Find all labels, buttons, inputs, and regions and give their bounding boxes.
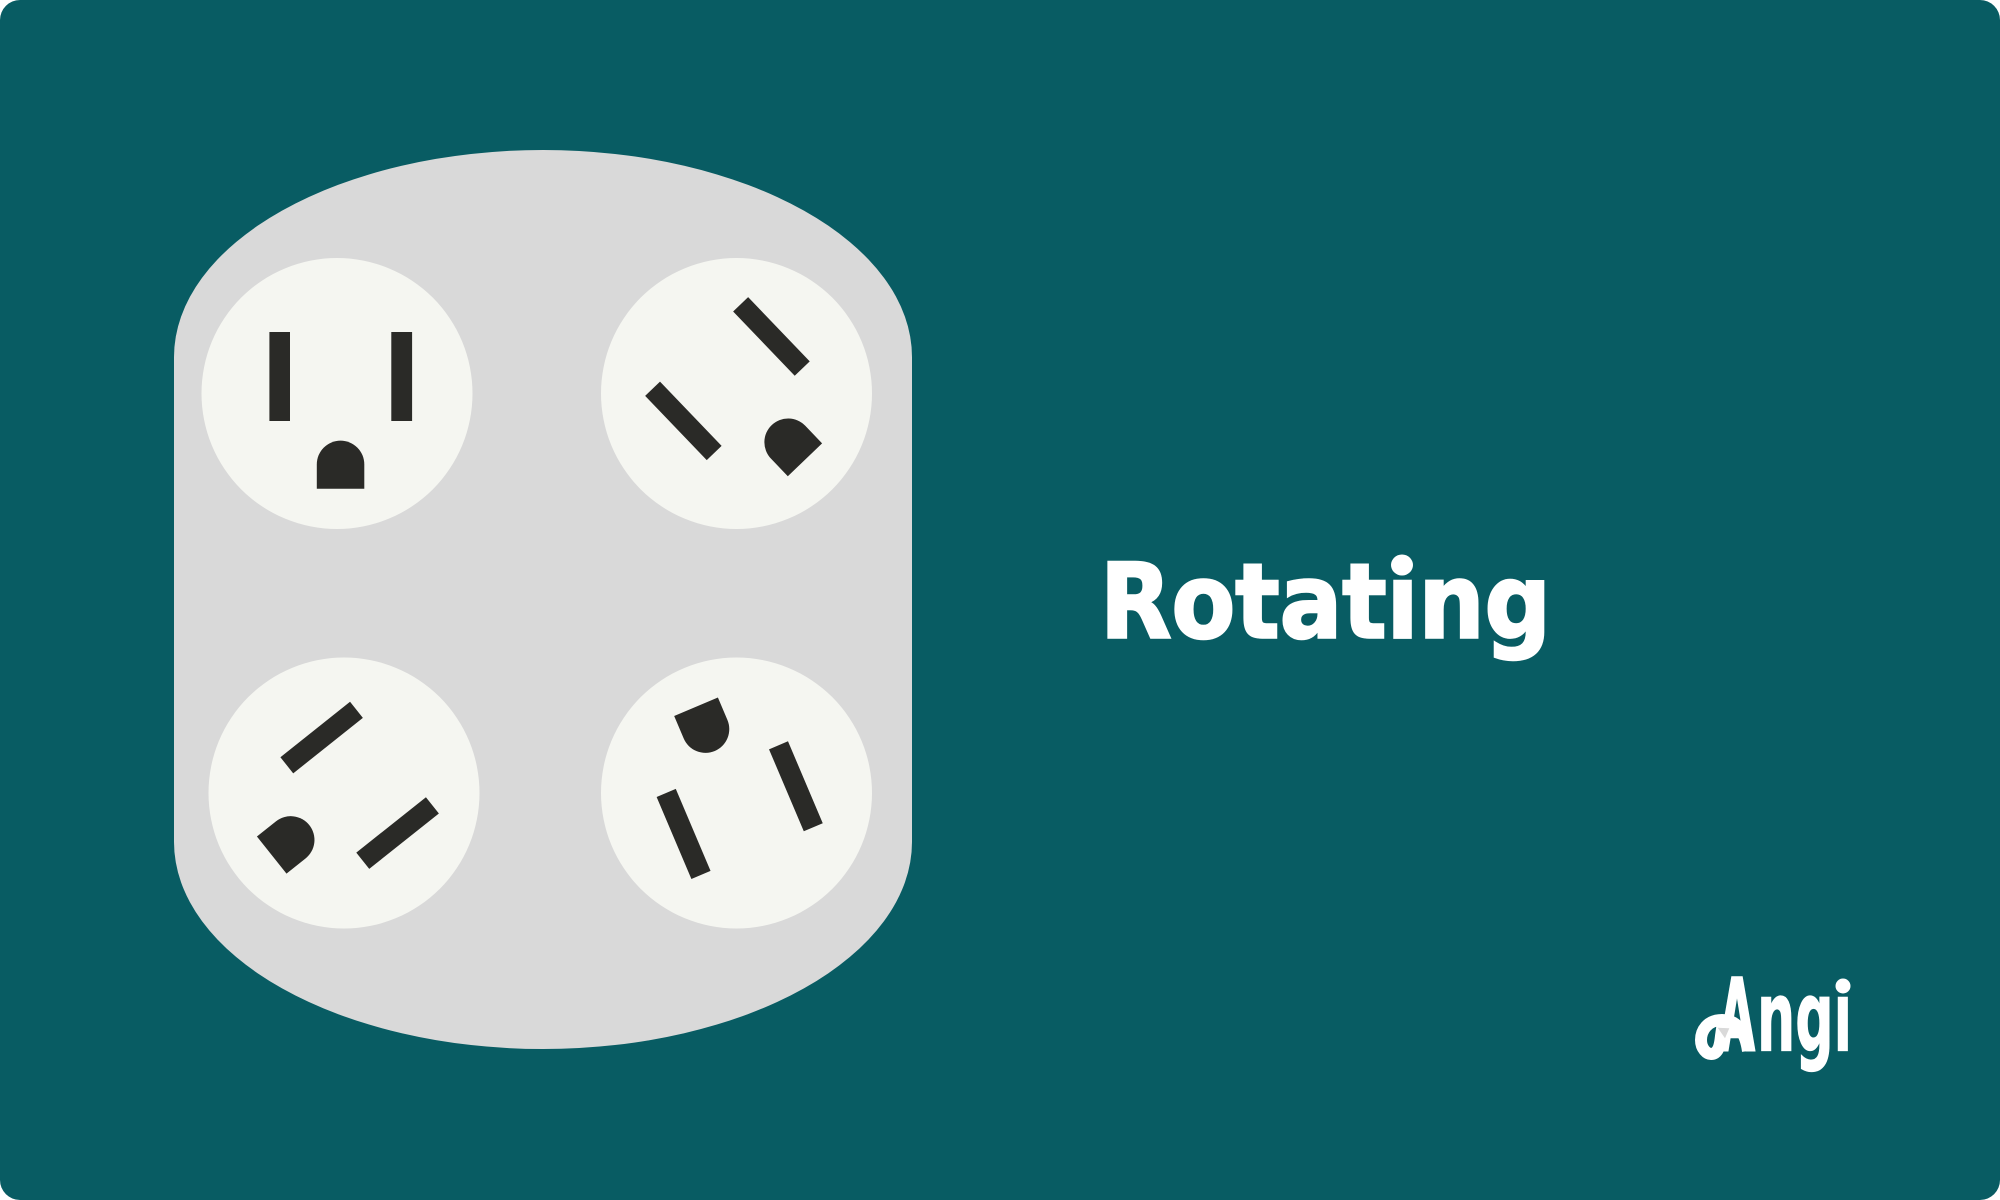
logo swirl shadow: [1718, 1028, 1729, 1038]
round i dot in title: [1391, 553, 1415, 576]
title: [1100, 543, 1551, 663]
socket: bottom left, rotated clockwise: [208, 658, 480, 928]
logo letters ngi: ngi: [1757, 961, 1852, 1074]
logo swirl: [1701, 1020, 1748, 1054]
logo: Angi: A: [1719, 958, 1755, 1075]
title text: Rotating: [1100, 543, 1551, 663]
outlet body: [174, 150, 912, 1049]
prong slots and ground hole: [269, 332, 412, 489]
socket face: [202, 258, 472, 529]
logo: Angi: [1701, 958, 1852, 1075]
socket: top left, upright: [202, 258, 472, 529]
panel: rotating outlet: [174, 150, 912, 1049]
socket face: [601, 658, 872, 928]
socket: bottom right, nearly inverted: [601, 658, 872, 928]
prong slots and ground hole: [227, 702, 439, 911]
round i dot in logo: [1835, 974, 1851, 994]
socket: top right, rotated counter-clockwise: [601, 258, 872, 529]
socket face: [601, 258, 872, 529]
prong slots and ground hole: [630, 679, 823, 879]
socket face: [208, 658, 480, 928]
prong slots and ground hole: [645, 297, 857, 509]
